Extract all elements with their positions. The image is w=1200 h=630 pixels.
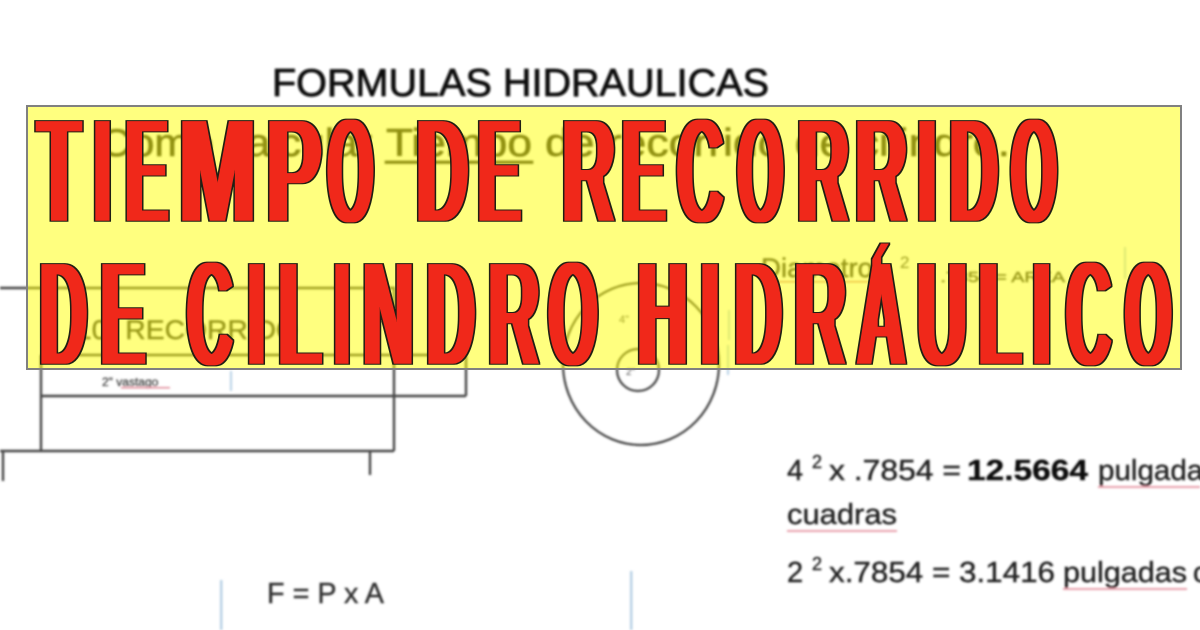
headline line 2: D <box>735 229 782 401</box>
headline line 1: D <box>950 85 998 258</box>
headline line 2: C <box>188 228 233 401</box>
document title: FORMULAS HIDRAULICAS <box>272 62 769 105</box>
calculation: rod area: x.7854 = 3.1416 <box>829 557 1055 589</box>
headline line 2: I <box>1033 228 1050 400</box>
calculation: rod area: pulgadas <box>1063 557 1187 589</box>
headline line 2: D <box>40 229 87 401</box>
headline line 1: O <box>328 84 373 257</box>
document subtitle: Como calcular <box>100 122 372 165</box>
banner panel <box>27 106 1181 369</box>
headline line 1: D <box>417 84 468 258</box>
headline line 1: C <box>678 86 723 258</box>
headline line 2: H <box>638 229 687 401</box>
headline line 2: R <box>489 228 539 401</box>
headline line 2: O <box>1126 227 1171 400</box>
calculation: bore area: 4 <box>787 455 803 487</box>
headline line 1: E <box>126 85 168 258</box>
headline line 1: O <box>738 84 783 257</box>
headline line 2: N <box>363 228 413 401</box>
area formula: 2 <box>900 253 909 272</box>
headline line 1 <box>38 83 1056 258</box>
label: rod: 2" vastago <box>102 375 159 389</box>
document subtitle: de recorrido de cilindro. <box>545 122 1010 165</box>
headline line 2: L <box>279 228 321 401</box>
calculation: rod area <box>787 554 1200 590</box>
headline line 1: I <box>918 86 936 258</box>
text cursor marks <box>220 247 1126 630</box>
calculation: bore area: x .7854 = <box>829 455 961 487</box>
diagram: cylinder cross section <box>563 283 719 445</box>
headline line 2: O <box>549 228 597 401</box>
headline line 1: P <box>267 85 321 258</box>
document subtitle <box>100 122 1010 165</box>
headline line 2: I <box>335 229 349 401</box>
headline line 1: T <box>38 85 80 258</box>
headline line 2 <box>40 227 1171 401</box>
label: rod 2 inch: 2" <box>626 367 636 378</box>
calculation: bore area: cuadras <box>787 499 897 531</box>
headline line 2: D <box>427 228 475 401</box>
headline line 2: R <box>795 227 846 401</box>
area formula: Diametro <box>761 253 873 283</box>
headline banner <box>26 105 1182 370</box>
headline line 2: I <box>701 229 719 401</box>
calculation: bore area <box>787 452 1200 532</box>
calculation: rod area: 2 <box>812 554 822 574</box>
headline line 1: I <box>94 84 110 257</box>
headline line 1: E <box>622 85 665 258</box>
calculation: bore area: 12.5664 <box>967 455 1088 487</box>
force formula: F = P x A <box>267 578 385 610</box>
headline <box>34 118 1174 366</box>
headline line 2: C <box>1067 228 1111 401</box>
headline line 1: O <box>1012 84 1056 257</box>
headline line 2: E <box>101 228 145 401</box>
diagram: cylinder side view <box>0 288 466 481</box>
headline line 2: Á <box>857 229 906 401</box>
headline line 1: R <box>563 83 615 258</box>
headline line 2: L <box>979 228 1021 401</box>
area formula <box>761 253 1065 286</box>
label: stroke length: 10" RECORRIDO <box>76 315 298 345</box>
label: bore 4 inch: 4" <box>619 314 629 326</box>
document subtitle: Tiempo <box>386 122 532 165</box>
calculation: rod area: 2 <box>787 557 803 589</box>
headline line 1: R <box>856 84 907 258</box>
area formula: x .7854 = AREA <box>925 269 1065 286</box>
headline line 1: M <box>179 86 256 258</box>
calculation: bore area: 2 <box>812 452 822 472</box>
headline line 1: R <box>798 84 849 258</box>
headline line 1: E <box>478 85 520 258</box>
headline line 2: I <box>248 227 264 400</box>
headline line 2: U <box>918 229 966 401</box>
